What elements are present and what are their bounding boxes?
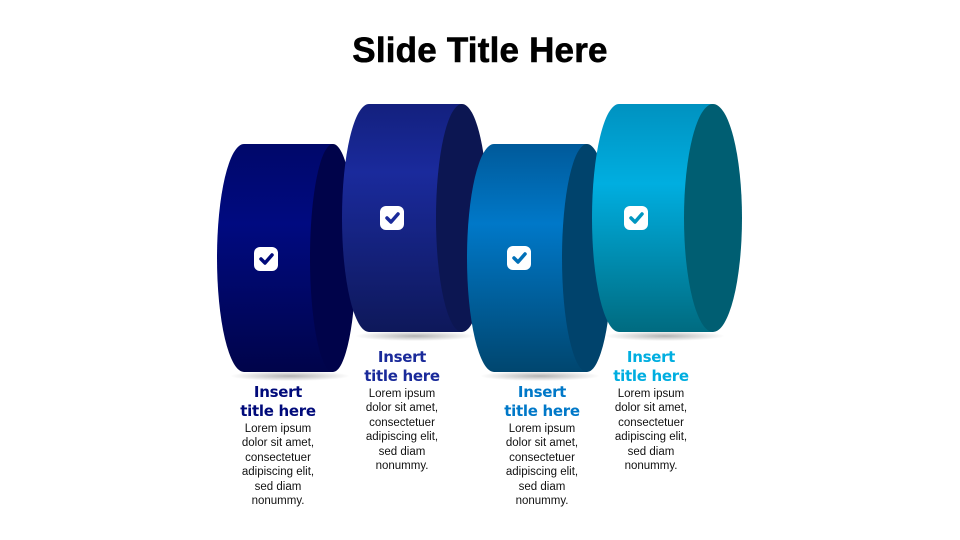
cylinder 4 bbox=[592, 104, 742, 341]
text block 4: dolor sit amet, bbox=[615, 402, 687, 414]
icon: check bbox=[507, 246, 531, 270]
text block 2: Insert bbox=[378, 348, 426, 366]
cylinder 1 bbox=[217, 144, 356, 381]
text block 3: Lorem ipsum bbox=[509, 423, 575, 435]
text block 3: Insert bbox=[518, 383, 566, 401]
icon: check bbox=[624, 206, 648, 230]
text block 2: dolor sit amet, bbox=[366, 402, 438, 414]
text block 3: consectetuer bbox=[509, 452, 575, 464]
text block 2 bbox=[364, 348, 440, 472]
text block 4 bbox=[613, 348, 689, 472]
cylinder 3 bbox=[467, 144, 612, 381]
text block 2: sed diam bbox=[379, 446, 425, 458]
text block 2: Lorem ipsum bbox=[369, 388, 435, 400]
text block 1: Insert bbox=[254, 383, 302, 401]
icon: check bbox=[254, 247, 278, 271]
text block 2: adipiscing elit, bbox=[366, 431, 438, 443]
text block 1 bbox=[240, 383, 316, 507]
text block 3: dolor sit amet, bbox=[506, 437, 578, 449]
text block 1: adipiscing elit, bbox=[242, 466, 314, 478]
text block 3: adipiscing elit, bbox=[506, 466, 578, 478]
text block 2: nonummy. bbox=[376, 460, 428, 472]
text block 2: consectetuer bbox=[369, 417, 435, 429]
text block 1: title here bbox=[240, 402, 316, 420]
text block 1: sed diam bbox=[255, 481, 301, 493]
text block 2: title here bbox=[364, 367, 440, 385]
text block 1: Lorem ipsum bbox=[245, 423, 311, 435]
text block 3: title here bbox=[504, 402, 580, 420]
title: Slide Title Here bbox=[352, 31, 608, 70]
text block 4: adipiscing elit, bbox=[615, 431, 687, 443]
text block 1: consectetuer bbox=[245, 452, 311, 464]
text block 4: sed diam bbox=[628, 446, 674, 458]
text block 4: consectetuer bbox=[618, 417, 684, 429]
text block 3 bbox=[504, 383, 580, 507]
text block 4: Insert bbox=[627, 348, 675, 366]
text block 3: sed diam bbox=[519, 481, 565, 493]
text block 4: title here bbox=[613, 367, 689, 385]
cylinder 2 bbox=[342, 104, 488, 341]
text block 4: Lorem ipsum bbox=[618, 388, 684, 400]
text block 3: nonummy. bbox=[516, 495, 568, 507]
text block 4: nonummy. bbox=[625, 460, 677, 472]
text block 1: dolor sit amet, bbox=[242, 437, 314, 449]
text block 1: nonummy. bbox=[252, 495, 304, 507]
icon: check bbox=[380, 206, 404, 230]
